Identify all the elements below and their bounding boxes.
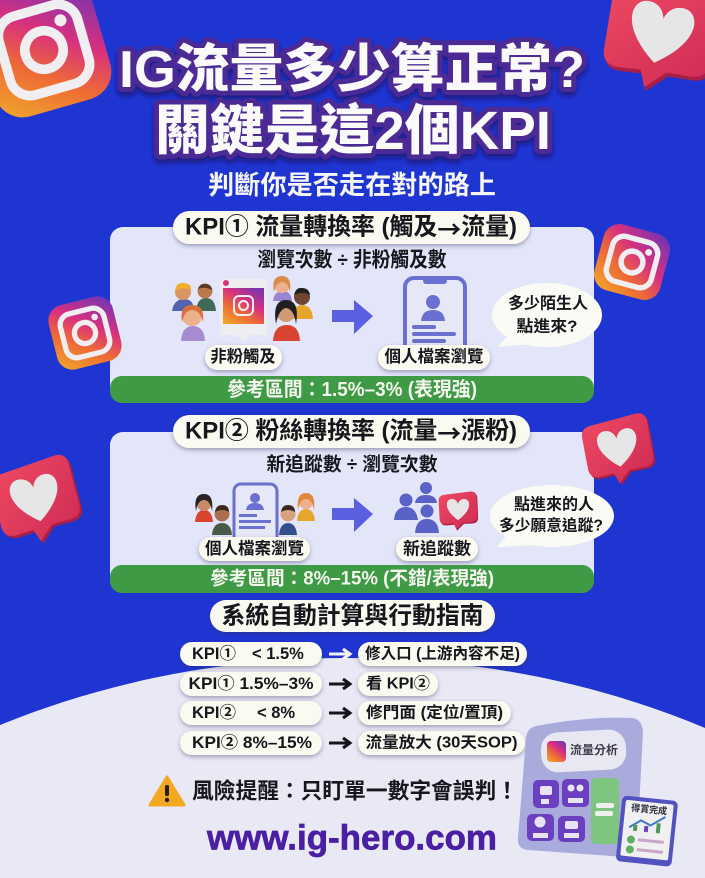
speech bubble bbox=[492, 283, 602, 347]
row 2 bbox=[180, 672, 438, 696]
title: IG流量多少算正常? bbox=[119, 41, 585, 99]
icon: heart badge small bbox=[439, 491, 478, 531]
row 4 bbox=[180, 731, 525, 755]
label: new followers: 新追蹤數 bbox=[403, 538, 471, 558]
reference range bar: 參考區間：8%–15% (不錯/表現強) bbox=[210, 566, 494, 590]
KPI 1 formula: 瀏覽次數 ÷ 非粉觸及數 bbox=[258, 248, 447, 272]
icon: instagram logo left bbox=[45, 293, 125, 373]
arrow bbox=[332, 498, 373, 532]
row 1: < 1.5% bbox=[252, 645, 304, 663]
label: non-follower reach bbox=[205, 345, 282, 370]
reference range bar bbox=[110, 376, 594, 403]
icon: heart badge top right bbox=[595, 0, 705, 103]
arrow bbox=[332, 300, 373, 334]
row 1: 修入口 (上游內容不足) bbox=[365, 644, 520, 662]
label: profile views: 個人檔案瀏覽 bbox=[384, 346, 484, 366]
row 3: < 8% bbox=[257, 704, 295, 722]
illustration: instagram post bbox=[220, 279, 267, 341]
row 3: 修門面 (定位/置頂) bbox=[366, 702, 503, 722]
illustration: people bbox=[172, 276, 313, 341]
action table bbox=[180, 642, 527, 755]
icon: heart badge right bbox=[580, 412, 658, 490]
icon: instagram logo top left bbox=[0, 0, 118, 124]
risk warning: 風險提醒：只盯單一數字會誤判！ bbox=[192, 778, 518, 804]
illustration: phone with profile bbox=[405, 278, 465, 358]
label: profile views bbox=[378, 345, 490, 370]
row 2: KPI① 1.5%–3% bbox=[188, 674, 314, 693]
row 4: KPI② 8%–15% bbox=[192, 733, 312, 752]
speech bubble bbox=[490, 485, 614, 547]
speech bubble: 點進來的人 bbox=[514, 496, 594, 514]
label: profile views: 個人檔案瀏覽 bbox=[205, 538, 304, 558]
icon: warning triangle bbox=[150, 777, 184, 805]
KPI 1 heading: KPI① 流量轉換率 (觸及→流量) bbox=[185, 210, 517, 244]
KPI 2 heading: KPI② 粉絲轉換率 (流量→漲粉) bbox=[185, 414, 517, 448]
illustration: result card bbox=[616, 795, 678, 867]
card title: 得賞完成 bbox=[631, 802, 668, 818]
label: non-follower reach: 非粉觸及 bbox=[210, 347, 276, 366]
label: new followers bbox=[396, 537, 478, 561]
speech bubble: 點進來? bbox=[516, 318, 578, 336]
illustration: new followers bbox=[394, 482, 439, 533]
label: profile views bbox=[199, 537, 310, 561]
illustration: calculator bbox=[518, 718, 643, 857]
title: 關鍵是這2個KPI bbox=[155, 100, 551, 161]
website url: www.ig-hero.com bbox=[206, 818, 497, 858]
icon: instagram logo right bbox=[590, 220, 674, 304]
icon: heart badge left bbox=[0, 452, 87, 552]
calculator keys bbox=[527, 778, 619, 844]
speech bubble: 多少陌生人 bbox=[508, 294, 588, 312]
lower white curved area bbox=[0, 658, 705, 878]
calculator label: 流量分析 bbox=[570, 742, 618, 757]
illustration: phone and people bbox=[195, 484, 315, 544]
title bbox=[119, 41, 585, 161]
row 3: KPI② bbox=[192, 703, 237, 722]
row 4: 流量放大 (30天SOP) bbox=[366, 732, 518, 752]
reference range bar bbox=[110, 565, 594, 593]
KPI 2 formula: 新追蹤數 ÷ 瀏覽次數 bbox=[266, 452, 438, 476]
speech bubble: 多少願意追蹤? bbox=[499, 516, 603, 534]
row 2: 看 KPI② bbox=[366, 674, 431, 692]
row 1: KPI① bbox=[192, 644, 237, 663]
subtitle: 判斷你是否走在對的路上 bbox=[208, 170, 496, 200]
reference range bar: 參考區間：1.5%–3% (表現強) bbox=[227, 377, 477, 401]
row 1 bbox=[180, 642, 527, 666]
row 3 bbox=[180, 701, 511, 725]
panel: KPI 2 bbox=[110, 414, 614, 593]
section heading: 系統自動計算與行動指南 bbox=[222, 602, 484, 630]
panel: KPI 1 bbox=[110, 210, 602, 403]
